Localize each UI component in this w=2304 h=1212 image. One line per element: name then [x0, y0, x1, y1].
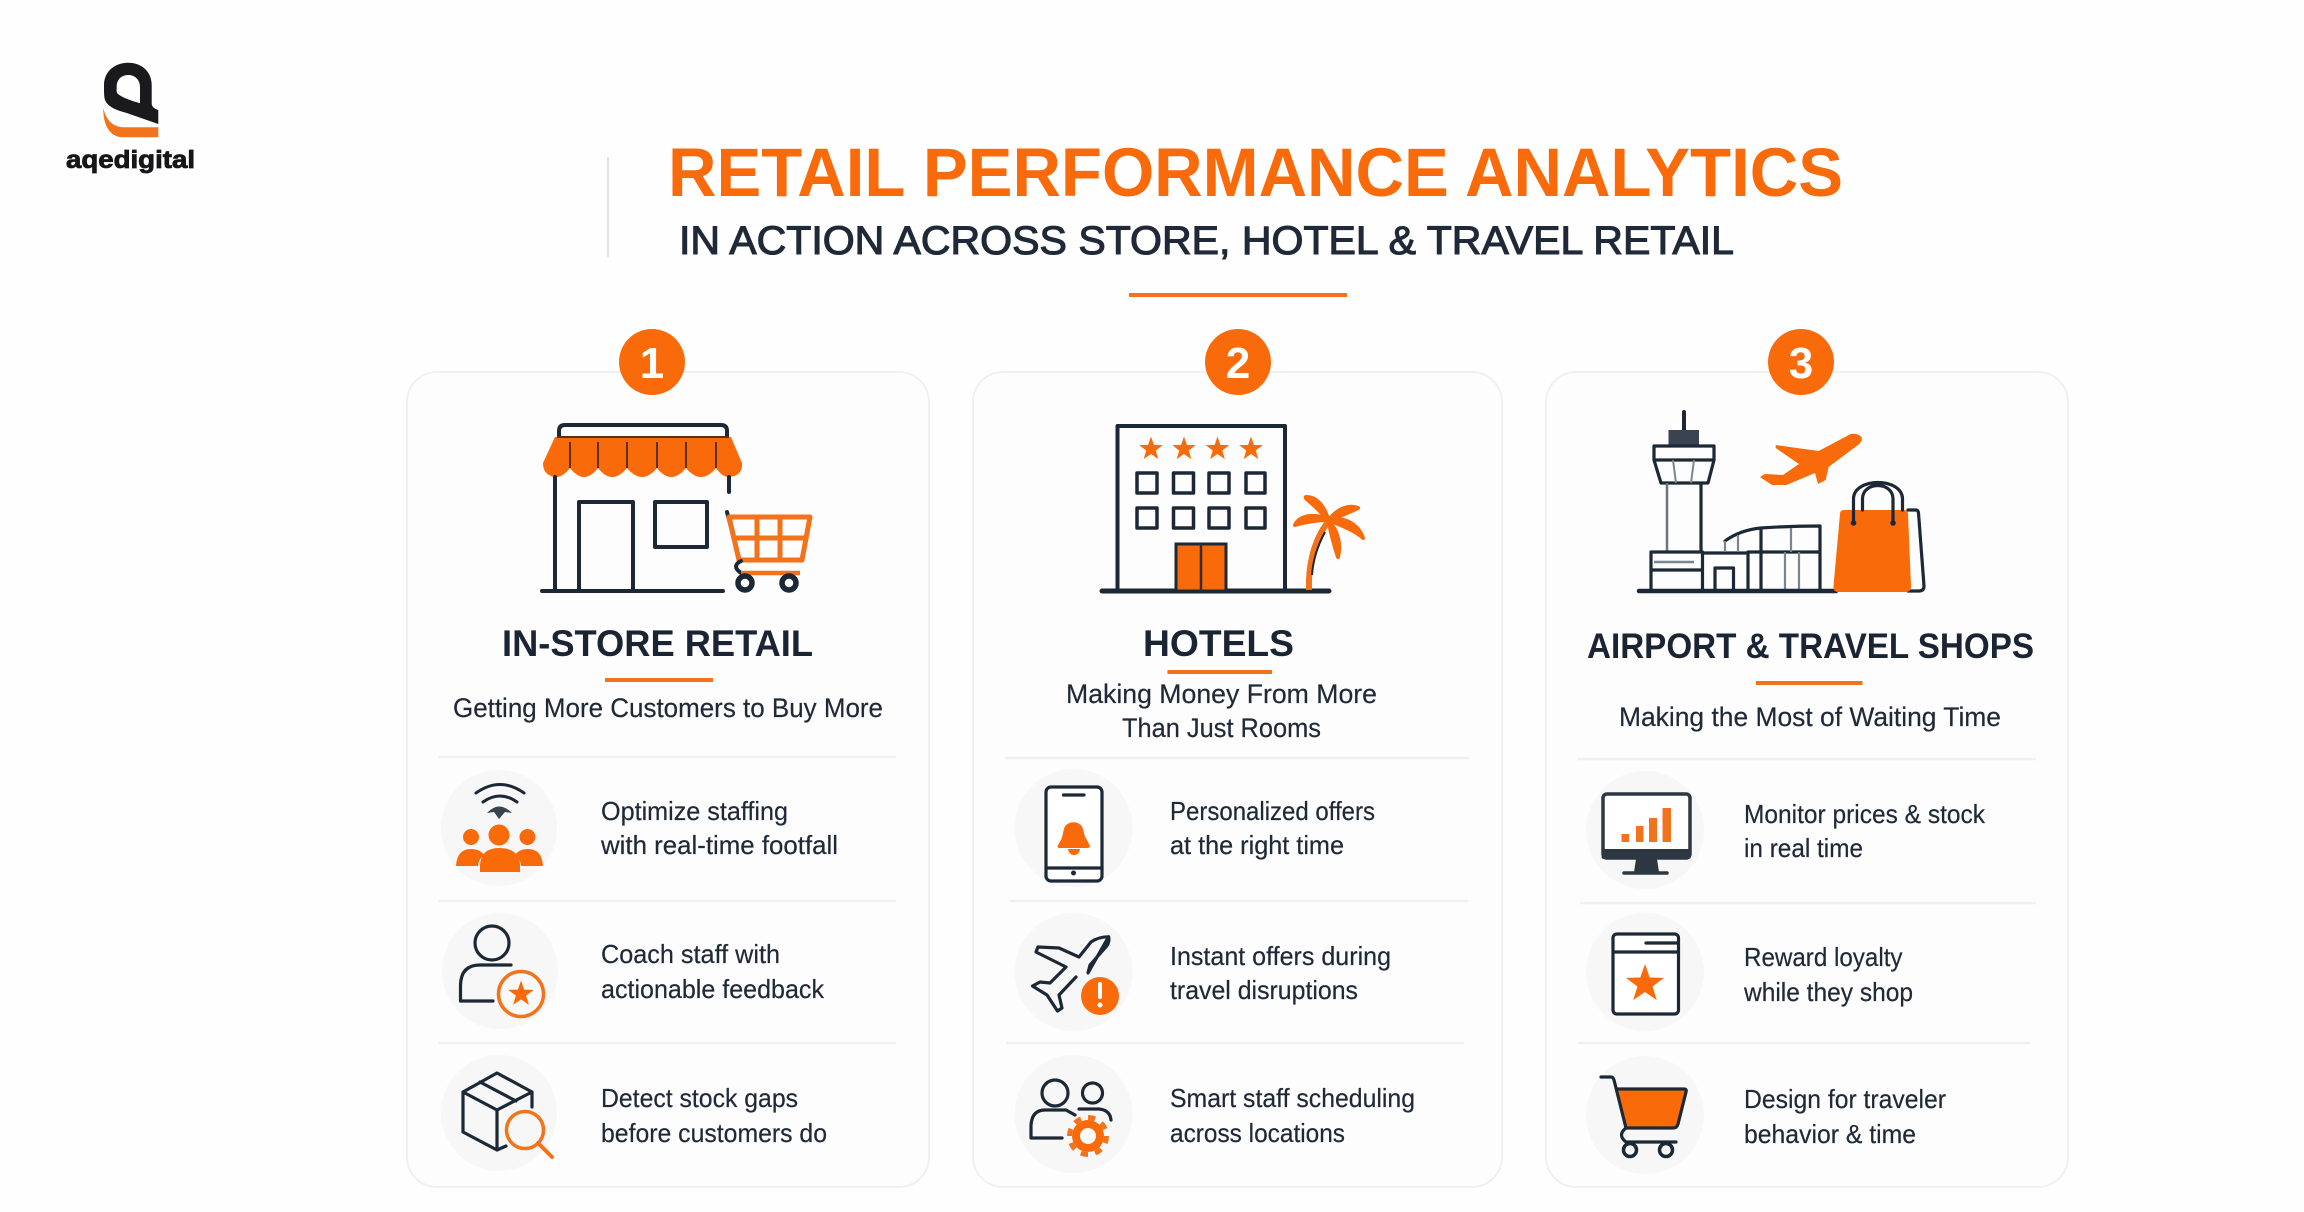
text: actionable feedback: [601, 974, 825, 1004]
heading rule: [1168, 670, 1272, 674]
tagline: Making Money From More: [1066, 679, 1377, 709]
text: Monitor prices & stock: [1744, 799, 1986, 829]
text: [1743, 942, 1913, 1007]
icon: hotel with palm: [1102, 426, 1363, 591]
text: Reward loyalty: [1744, 942, 1902, 972]
item: detect stock gaps: [441, 1055, 827, 1171]
text: before customers do: [601, 1118, 827, 1148]
badge 3: 3: [1789, 339, 1813, 388]
item: reward loyalty: [1586, 913, 1913, 1031]
text: at the right time: [1170, 830, 1344, 860]
icon: logo mark: [103, 63, 158, 137]
icon: monitor with bars: [1602, 794, 1691, 873]
text: [1744, 799, 1986, 863]
icon: airport tower, plane and bag: [1639, 412, 1924, 592]
text: travel disruptions: [1170, 975, 1358, 1005]
item: instant offers: [1014, 913, 1391, 1031]
text: in real time: [1744, 833, 1863, 863]
text: Design for traveler: [1744, 1084, 1946, 1114]
badge 2: [1205, 329, 1271, 395]
text: with real-time footfall: [600, 830, 838, 860]
panel: hotels: [973, 329, 1502, 1187]
heading rule: [1756, 681, 1862, 685]
icon: wifi and people: [456, 784, 543, 872]
text: Optimize staffing: [601, 796, 788, 826]
text: Coach staff with: [601, 939, 780, 969]
badge 2: 2: [1226, 339, 1250, 388]
badge 1: [619, 329, 685, 395]
badge 1: 1: [640, 339, 664, 388]
panel: in-store retail: [407, 329, 929, 1187]
tagline: Than Just Rooms: [1122, 713, 1321, 743]
text: [601, 1083, 827, 1148]
subtitle: IN ACTION ACROSS STORE, HOTEL & TRAVEL RETAIL: [679, 219, 1734, 263]
text: across locations: [1170, 1118, 1345, 1148]
item: monitor prices: [1586, 771, 1986, 889]
item: coach staff: [442, 913, 825, 1029]
icon: box with magnifier: [463, 1073, 552, 1157]
text: Smart staff scheduling: [1170, 1083, 1415, 1113]
text: [600, 796, 838, 860]
item: personalized offers: [1014, 769, 1375, 887]
heading: IN-STORE RETAIL: [502, 623, 813, 664]
item: optimize staffing: [441, 770, 838, 886]
panel: airport and travel shops: [1546, 329, 2068, 1187]
icon: phone with bell: [1046, 787, 1102, 881]
title rule: [1129, 293, 1347, 297]
text: Instant offers during: [1170, 941, 1391, 971]
text: [1170, 1083, 1415, 1148]
header divider: [607, 157, 609, 257]
text: [1170, 941, 1391, 1005]
heading: AIRPORT & TRAVEL SHOPS: [1587, 627, 2034, 666]
item: design for traveler: [1586, 1056, 1946, 1174]
text: Personalized offers: [1170, 796, 1375, 826]
logo wordmark: aqedigital: [66, 146, 195, 174]
heading rule: [605, 678, 713, 682]
icon: plane with alert: [1032, 937, 1119, 1015]
text: while they shop: [1743, 977, 1913, 1007]
item: smart staff scheduling: [1014, 1055, 1415, 1173]
icon: shopping cart: [1601, 1077, 1686, 1156]
text: behavior & time: [1744, 1119, 1916, 1149]
badge 3: [1768, 329, 1834, 395]
tagline: Making the Most of Waiting Time: [1619, 702, 2001, 732]
icon: staff with gear: [1031, 1080, 1111, 1154]
heading: HOTELS: [1143, 623, 1294, 664]
icon: store with cart: [542, 425, 810, 591]
text: Detect stock gaps: [601, 1083, 798, 1113]
title: RETAIL PERFORMANCE ANALYTICS: [668, 134, 1843, 211]
tagline: Getting More Customers to Buy More: [453, 693, 883, 723]
text: [1744, 1084, 1946, 1149]
text: [1170, 796, 1375, 860]
icon: loyalty card with star: [1613, 934, 1678, 1014]
tagline: [1066, 679, 1377, 743]
logo: aqedigital: [66, 63, 195, 174]
icon: person with star: [460, 926, 544, 1016]
text: [601, 939, 825, 1004]
